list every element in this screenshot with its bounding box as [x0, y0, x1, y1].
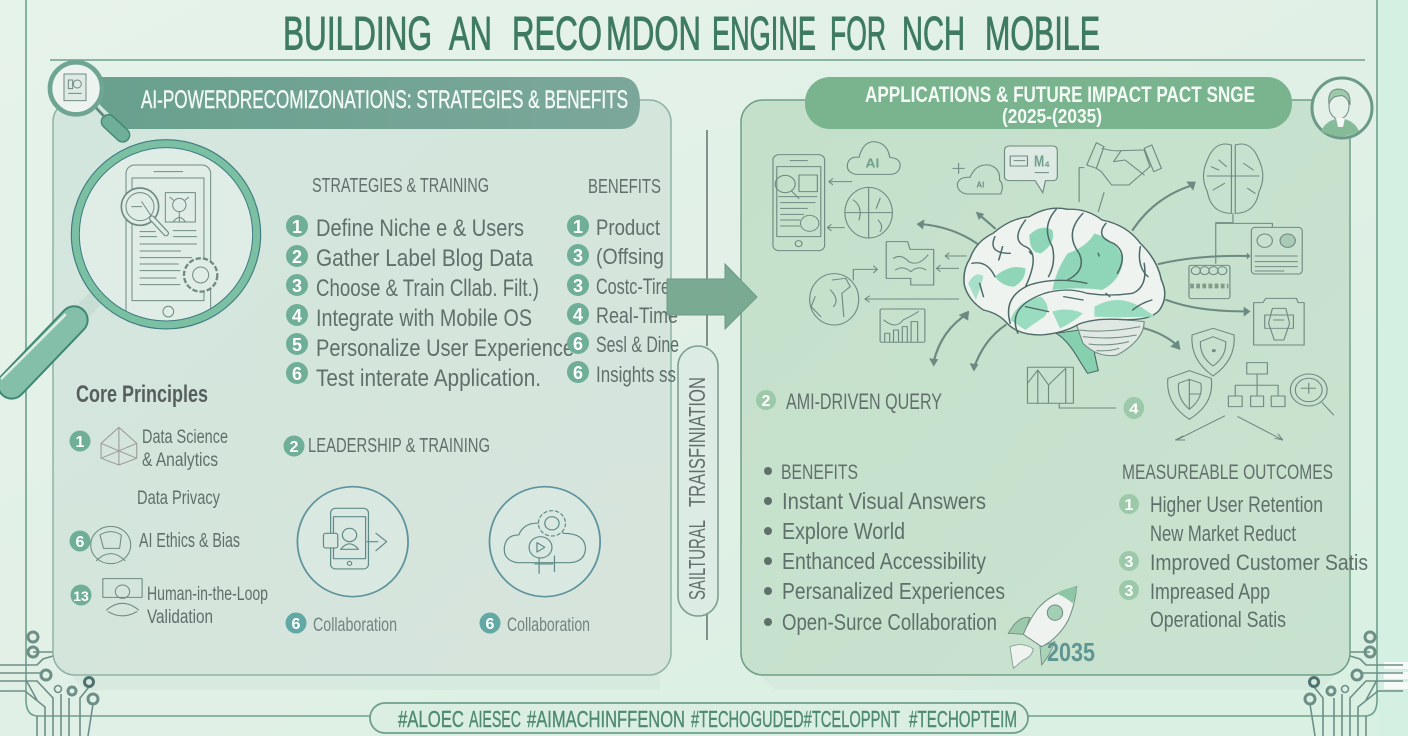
title: MDON [606, 6, 701, 60]
heading: core principles: Core Principles [76, 381, 208, 408]
list: strategies [286, 215, 574, 392]
list: benefits: Persanalized Experiences [782, 578, 1005, 604]
icon: phone in circle [297, 487, 408, 597]
icon: brain [964, 208, 1165, 373]
icon: beads panel [1189, 265, 1230, 299]
list: strategies: Integrate with Mobile OS [316, 305, 532, 332]
icon: cloud in circle [489, 487, 600, 597]
hashtag bar: AIESEC [469, 706, 521, 732]
heading: leadership and training [284, 435, 490, 457]
vertical pill: cultural transformation [678, 346, 718, 616]
list: measurable outcomes: 1 [1125, 497, 1134, 514]
panel heading [865, 82, 1255, 128]
item: data science and analytics [70, 427, 228, 471]
item: human in the loop validation: Validation [147, 607, 213, 628]
icon: AI cloud: AI [866, 157, 879, 171]
hashtag bar: #TECHOGUDED#TCELOPPNT [691, 706, 900, 732]
icon: workflow panel [886, 242, 934, 285]
title: FOR [830, 6, 886, 60]
title: RECO [512, 6, 602, 60]
title: NCH [902, 6, 965, 60]
hashtag bar: #AIMACHINFFENON [527, 706, 685, 732]
title: ENGINE [712, 6, 816, 60]
list: benefits: 6 [573, 363, 583, 383]
list: measurable outcomes: 3 [1125, 554, 1134, 571]
item: data science and analytics: 1 [76, 434, 85, 451]
list: measurable outcomes: MEASUREABLE OUTCOMES [1122, 461, 1333, 484]
panel heading: (2025-(2035) [1002, 106, 1102, 128]
list: measurable outcomes: Operational Satis [1150, 607, 1286, 632]
list: strategies: Choose & Train Cllab. Filt.) [316, 275, 539, 302]
list: strategies: Test interate Application. [316, 365, 541, 392]
icon: speech bubble: M₄ [1034, 154, 1050, 170]
icon: small magnifier [50, 62, 123, 135]
arrows: brain outward [916, 182, 1251, 372]
icon: bar chart [880, 309, 925, 342]
panel shadows [70, 675, 1335, 690]
title: BUILDING [283, 6, 432, 60]
item: AI ethics and bias [70, 526, 240, 564]
label: collaboration two [480, 612, 590, 636]
item: AI ethics and bias: 6 [76, 534, 85, 551]
list: benefits: Real-Time [596, 303, 678, 328]
icon: speech bubble [1004, 146, 1057, 193]
icon: rocket [1008, 587, 1077, 668]
icon: shield bottom [1168, 371, 1212, 419]
list: strategies: Define Niche e & Users [316, 215, 524, 242]
label: collaboration two: Collaboration [507, 615, 590, 636]
label: collaboration one: Collaboration [313, 615, 397, 636]
list: measurable outcomes: Impreased App [1150, 579, 1270, 604]
panel: applications and future impact [741, 77, 1372, 675]
hashtag bar: #ALOEC [398, 706, 464, 732]
heading: leadership and training: LEADERSHIP & TRAINING [308, 435, 490, 457]
list: benefits: Explore World [782, 518, 905, 544]
right edge tint [1378, 0, 1408, 736]
divider line [706, 130, 708, 640]
diagram: brain with connected icons [773, 142, 1334, 440]
circuit decoration: left corner [0, 632, 98, 736]
list: measurable outcomes: New Market Reduct [1150, 521, 1296, 546]
list: measurable outcomes: Improved Customer Satis [1150, 550, 1368, 575]
list: benefits [567, 215, 679, 387]
label: collaboration one [286, 612, 397, 636]
heading: strategies and training: STRATEGIES & TRAINING [312, 175, 489, 197]
icon: sphere network [845, 187, 892, 238]
icon: large magnifier over phone [2, 140, 261, 385]
list: strategies: Personalize User Experience [316, 335, 574, 362]
icon: chart card [1251, 227, 1302, 274]
icon: search magnifier [1290, 374, 1334, 415]
list: benefits: 3 [573, 276, 583, 296]
list: benefits: Product [596, 215, 660, 240]
heading: AI driven query: AMI-DRIVEN QUERY [786, 389, 942, 414]
list: strategies: 2 [292, 247, 302, 267]
panel heading: APPLICATIONS & FUTURE IMPACT PACT SNGE [865, 82, 1255, 107]
icon: AI cloud with spark [953, 163, 1002, 194]
number badge: 4 [1124, 397, 1144, 419]
hashtag bar [370, 703, 1028, 733]
label: collaboration two: 6 [486, 616, 495, 633]
heading: benefits: BENEFITS [588, 176, 661, 198]
arrow: left to right [667, 264, 757, 329]
list: benefits: Enthanced Accessibility [782, 548, 986, 574]
list: strategies: Gather Label Blog Data [316, 245, 534, 272]
list: benefits: Open-Surce Collaboration [782, 609, 997, 635]
circuit decoration: right corner [1305, 632, 1408, 736]
icon: org chart [1176, 363, 1285, 440]
list: benefits: Instant Visual Answers [782, 488, 986, 514]
list: measurable outcomes [1119, 461, 1368, 632]
title: AN [449, 6, 492, 60]
item: human in the loop validation: 13 [73, 588, 89, 604]
item: data science and analytics: & Analytics [142, 450, 218, 471]
icon: globe [810, 274, 859, 325]
icon: phone with search [773, 155, 825, 251]
icon: handshake [1079, 143, 1161, 212]
arrows: left cluster [827, 179, 966, 302]
icon: top right brain [1203, 144, 1263, 213]
list: benefits: 4 [573, 305, 583, 325]
item: data privacy: Data Privacy [137, 488, 220, 509]
item: AI ethics and bias: AI Ethics & Bias [139, 530, 240, 552]
icon: robot card [1254, 298, 1304, 345]
vertical pill: cultural transformation: TRAISFINIATION [684, 377, 710, 507]
label: collaboration one: 6 [292, 616, 301, 633]
list: benefits: (Offsing [596, 244, 664, 269]
item: data science and analytics: Data Science [142, 427, 228, 448]
icon: person avatar [1312, 78, 1372, 138]
list: strategies: 1 [292, 217, 302, 237]
panel: strategies and benefits [2, 62, 679, 675]
list: strategies: 6 [292, 364, 302, 384]
panel header pill [805, 77, 1292, 129]
panel header ribbon [100, 77, 640, 129]
icon: shield top [1192, 328, 1234, 376]
list: benefits: BENEFITS [781, 461, 858, 484]
icon: AI cloud [847, 142, 900, 174]
connectors [1216, 213, 1272, 263]
icon: AI cloud with spark: AI [977, 180, 984, 189]
panel heading: AI-POWERDRECOMIZONATIONS: STRATEGIES & BENEFITS [141, 86, 628, 114]
list: strategies: 3 [292, 276, 302, 296]
list: benefits: Sesl & Dine [596, 332, 679, 357]
vertical pill: cultural transformation: SAILTURAL [684, 520, 710, 600]
heading: AI driven query [756, 389, 942, 414]
label: 2035: 2035 [1047, 637, 1095, 667]
list: benefits: 1 [573, 217, 583, 237]
item: human in the loop validation [70, 579, 268, 628]
title: MOBILE [985, 6, 1100, 60]
heading: AI driven query: 2 [762, 393, 771, 410]
hashtag bar: #TECHOPTEIM [909, 706, 1017, 732]
list: benefits [764, 461, 1005, 635]
list: measurable outcomes: Higher User Retention [1150, 492, 1323, 517]
item: human in the loop validation: Human-in-the-Loop [147, 584, 268, 605]
list: benefits: 3 [573, 246, 583, 266]
list: benefits: Insights ss [596, 362, 676, 387]
number badge: 4: 4 [1129, 401, 1139, 417]
heading: leadership and training: 2 [290, 439, 299, 456]
list: measurable outcomes: 3 [1125, 583, 1134, 600]
list: benefits: 6 [573, 334, 583, 354]
list: strategies: 5 [292, 335, 302, 355]
list: benefits: Costc-Tire [596, 274, 670, 299]
icon: layout chart [1027, 367, 1115, 408]
list: strategies: 4 [292, 306, 302, 326]
